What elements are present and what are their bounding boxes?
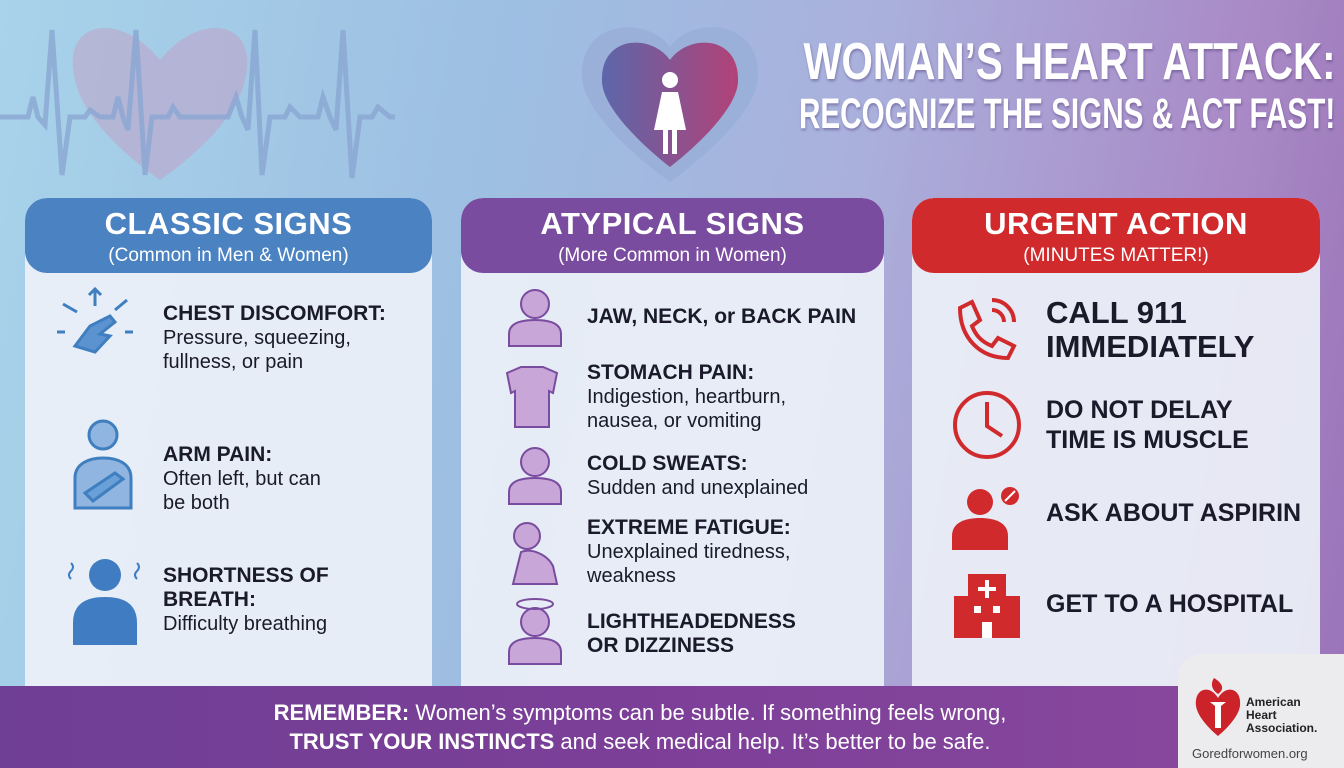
text: AHA [1246, 695, 1317, 735]
text: arm pain: Often left, but can [163, 468, 321, 490]
icon: aspirin [952, 487, 1019, 550]
heading: urgent: URGENT ACTION [984, 206, 1248, 241]
heading: atypical: (More Common in Women) [558, 245, 787, 266]
heading: atypical: ATYPICAL SIGNS [540, 206, 805, 241]
title: WOMAN’S HEART ATTACK: [803, 33, 1335, 91]
text: cold sweats [587, 452, 808, 499]
text: fatigue [587, 516, 791, 587]
title [799, 33, 1335, 138]
text: AHA: American [1246, 695, 1301, 709]
text: do not delay: TIME IS MUSCLE [1046, 426, 1249, 454]
text: arm pain: ARM PAIN: [163, 443, 272, 466]
icon: phone [958, 298, 1017, 360]
heading: urgent [912, 198, 1320, 273]
text: chest discomfort [163, 302, 386, 373]
heading: urgent: (MINUTES MATTER!) [1023, 245, 1209, 266]
text: stomach: nausea, or vomiting [587, 410, 762, 432]
text: do not delay: DO NOT DELAY [1046, 396, 1233, 424]
icon: dizziness [508, 598, 562, 665]
text: shortness of breath: Difficulty breathing [163, 613, 327, 635]
icon: hand [57, 287, 133, 354]
text: jaw: JAW, NECK, or BACK PAIN [587, 305, 856, 328]
heading: classic [25, 198, 432, 273]
text: shortness of breath: BREATH: [163, 588, 256, 611]
text: fatigue: weakness [587, 565, 676, 587]
text: shortness of breath: SHORTNESS OF [163, 564, 329, 587]
icon: AHA heart torch [1196, 678, 1240, 736]
text: lightheadedness [587, 610, 796, 657]
text: hospital: GET TO A HOSPITAL [1046, 590, 1293, 618]
text: do not delay [1046, 396, 1249, 454]
text: stomach: Indigestion, heartburn, [587, 386, 786, 408]
text: chest discomfort: CHEST DISCOMFORT: [163, 302, 386, 325]
text: stomach: STOMACH PAIN: [587, 361, 754, 384]
text: call 911: CALL 911 [1046, 295, 1187, 330]
text: lightheadedness: LIGHTHEADEDNESS [587, 610, 796, 633]
text: remember: TRUST YOUR INSTINCTS and seek medical help. It’s better to be safe. [289, 729, 990, 754]
icon: stomach [506, 366, 558, 428]
text: website: Goredforwomen.org [1192, 746, 1308, 761]
heading: classic: (Common in Men & Women) [108, 245, 349, 266]
text: call 911 [1046, 295, 1254, 364]
text: AHA: Association. [1246, 721, 1317, 735]
icon: sweats [508, 447, 562, 505]
icon: clock [953, 391, 1021, 459]
text: remember [274, 700, 1006, 754]
icon: woman [654, 72, 686, 154]
text: lightheadedness: OR DIZZINESS [587, 634, 734, 657]
text: arm pain [163, 443, 321, 514]
heading: atypical [461, 198, 884, 273]
icon: arm pain [74, 420, 132, 510]
text: arm pain: be both [163, 492, 230, 514]
text: chest discomfort: Pressure, squeezing, [163, 327, 351, 349]
logo box [1178, 654, 1344, 768]
icon: hospital [954, 574, 1020, 638]
icon: fatigue [512, 522, 558, 585]
background ECG and hearts [0, 28, 395, 180]
text: stomach [587, 361, 786, 432]
panel: classic signs [25, 198, 432, 688]
text: fatigue: EXTREME FATIGUE: [587, 516, 791, 539]
icon: jaw pain [508, 289, 562, 347]
text: cold sweats: Sudden and unexplained [587, 477, 808, 499]
bottom banner [0, 686, 1344, 768]
text: AHA: Heart [1246, 708, 1277, 722]
heading: classic: CLASSIC SIGNS [105, 206, 352, 241]
panel: atypical signs [461, 198, 884, 688]
text: shortness of breath [163, 564, 329, 635]
text: fatigue: Unexplained tiredness, [587, 541, 790, 563]
text: remember: REMEMBER: Women’s symptoms can be subtle. If something feels wrong, [274, 700, 1006, 725]
text: call 911: IMMEDIATELY [1046, 329, 1254, 364]
icon: shortness of breath [68, 559, 140, 645]
central heart icon [582, 28, 758, 182]
text: cold sweats: COLD SWEATS: [587, 452, 748, 475]
title: RECOGNIZE THE SIGNS & ACT FAST! [799, 90, 1335, 138]
text: aspirin: ASK ABOUT ASPIRIN [1046, 499, 1301, 527]
text: chest discomfort: fullness, or pain [163, 351, 303, 373]
panel: urgent action [912, 198, 1320, 688]
